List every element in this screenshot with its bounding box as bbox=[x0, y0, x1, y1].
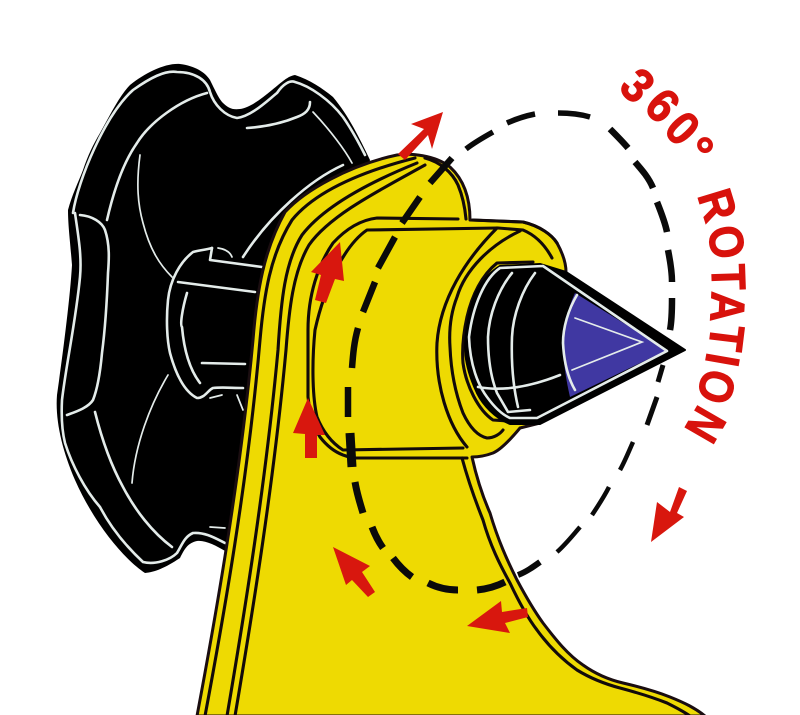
collar cylinder bbox=[308, 218, 557, 458]
rotation path: dashed circle bbox=[348, 113, 672, 590]
label: 360° ROTATION: ° bbox=[670, 128, 724, 175]
centre point cone bbox=[465, 264, 685, 424]
arrow: right bbox=[651, 487, 687, 542]
black knob bbox=[57, 64, 370, 573]
label: 360° ROTATION bbox=[610, 57, 756, 451]
cone highlights bbox=[469, 266, 667, 418]
yellow bracket body bbox=[197, 154, 705, 715]
label: 360° ROTATION: T bbox=[701, 263, 756, 291]
label: 360° ROTATION: 0 bbox=[655, 101, 711, 156]
label: 360° ROTATION: T bbox=[698, 322, 755, 354]
arrow: top bbox=[398, 112, 443, 160]
cone blue tip bbox=[563, 293, 667, 397]
label: 360° ROTATION: O bbox=[686, 364, 747, 410]
label: 360° ROTATION: N bbox=[674, 398, 737, 451]
arrow: collar lower bbox=[293, 398, 325, 458]
arrow: collar upper bbox=[311, 242, 344, 303]
bracket inner contour lines bbox=[205, 158, 690, 715]
label: 360° ROTATION: I bbox=[695, 349, 750, 370]
label: 360° ROTATION: O bbox=[697, 221, 756, 263]
label: 360° ROTATION: 6 bbox=[635, 77, 691, 133]
label: 360° ROTATION: R bbox=[687, 183, 748, 228]
label: 360° ROTATION: A bbox=[700, 290, 755, 324]
arrow: bottom bbox=[467, 601, 528, 633]
red direction arrows bbox=[293, 112, 687, 633]
label: 360° ROTATION: 3 bbox=[610, 57, 666, 113]
arrow: lower left bbox=[333, 547, 375, 597]
